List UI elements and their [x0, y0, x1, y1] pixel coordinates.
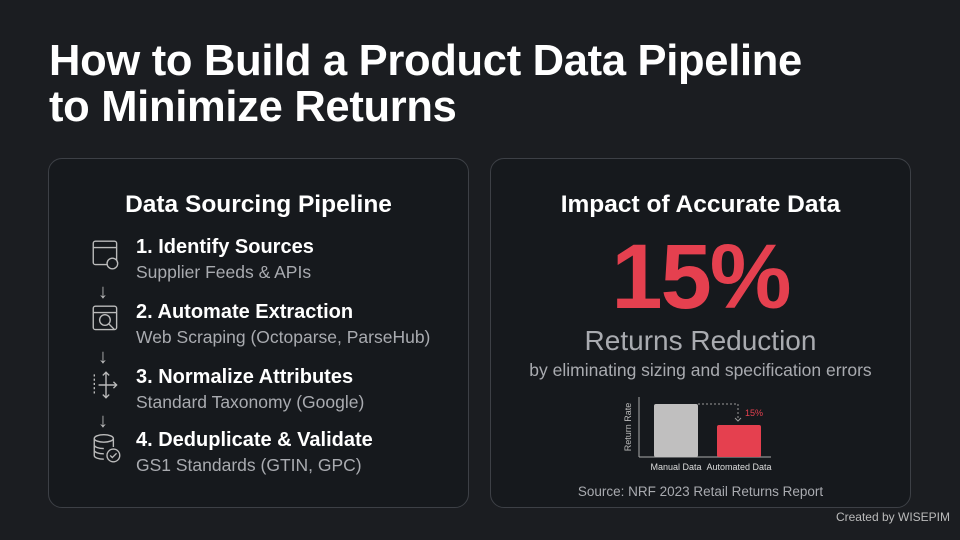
- source: Source: NRF 2023 Retail Returns Report: [578, 484, 823, 499]
- stat caption: by eliminating sizing and specification errors: [529, 360, 872, 380]
- title: [49, 37, 802, 131]
- icon: browser search: [92, 306, 118, 330]
- step 2: [92, 301, 430, 347]
- step 4: GS1 Standards (GTIN, GPC): [136, 455, 362, 475]
- icon: database check: [94, 434, 120, 462]
- step 4: [94, 429, 373, 475]
- arrow 2: ↓: [98, 346, 108, 368]
- icon: browser gear: [92, 240, 118, 270]
- title: How to Build a Product Data Pipeline: [49, 37, 802, 85]
- title: to Minimize Returns: [49, 83, 457, 131]
- panel: impact of accurate data: [490, 158, 911, 508]
- step 3: Standard Taxonomy (Google): [136, 392, 364, 412]
- step 3: 3. Normalize Attributes: [136, 366, 353, 388]
- heading: impact: Impact of Accurate Data: [561, 191, 840, 218]
- icon: normalize: [94, 371, 118, 399]
- bar chart: [623, 397, 772, 472]
- step 2: Web Scraping (Octoparse, ParseHub): [136, 327, 430, 347]
- panel: data sourcing pipeline: [48, 158, 469, 508]
- stat label: Returns Reduction: [585, 325, 816, 356]
- step 2: 2. Automate Extraction: [136, 301, 353, 323]
- step 1: Supplier Feeds & APIs: [136, 262, 311, 282]
- heading: data sourcing pipeline: Data Sourcing Pipeline: [125, 191, 392, 218]
- big stat 15%: 15%: [611, 226, 790, 328]
- bar chart: 15%: [745, 408, 763, 418]
- credit: Created by WISEPIM: [836, 510, 950, 524]
- step 1: [92, 236, 314, 282]
- step 3: [94, 366, 364, 412]
- arrow 1: ↓: [98, 281, 108, 303]
- step 4: 4. Deduplicate & Validate: [136, 429, 373, 451]
- arrow 3: ↓: [98, 410, 108, 432]
- bar chart: Return Rate: [623, 403, 633, 451]
- bar chart: Automated Data: [706, 462, 772, 472]
- bar chart: Manual Data: [650, 462, 702, 472]
- step 1: 1. Identify Sources: [136, 236, 314, 258]
